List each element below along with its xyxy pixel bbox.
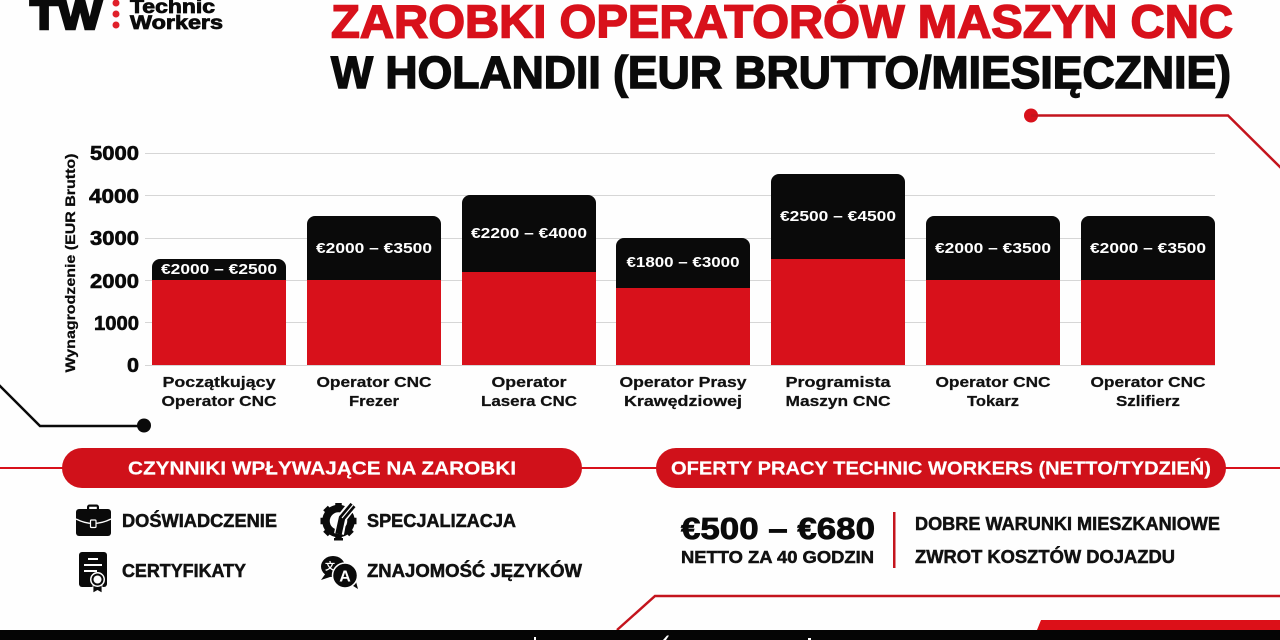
circuit line: top right red: [1024, 108, 1280, 169]
circuit line: left black: [0, 384, 151, 432]
panel: factors affecting salary: [62, 448, 582, 593]
bar: Operator Lasera CNC: Lasera CNC: [481, 393, 577, 410]
bar: Operator CNC Tokarz: Tokarz: [967, 393, 1019, 410]
label: Specjalizacja: SPECJALIZACJA: [367, 511, 516, 531]
bar: Operator Lasera CNC: [462, 195, 596, 410]
heading pill: offers: [656, 448, 1226, 488]
y axis labels: 5000: [90, 143, 139, 165]
title: W HOLANDII (EUR BRUTTO/MIESIĘCZNIE): [331, 47, 1231, 98]
bar chart: salaries: [62, 143, 1215, 410]
heading pill: factors: CZYNNIKI WPŁYWAJĄCE NA ZAROBKI: [128, 458, 516, 478]
bar: Operator Prasy Krawędziowej: Operator Prasy: [620, 374, 747, 391]
bar: Operator CNC Frezer: Operator CNC: [316, 374, 432, 391]
y axis labels: 0: [127, 355, 139, 377]
pay range: €500 – €680: [681, 511, 875, 546]
icon: language speech bubbles: [321, 556, 358, 589]
bar: Operator Prasy Krawędziowej: €1800 – €3000: [626, 254, 740, 271]
heading pill: offers: OFERTY PRACY TECHNIC WORKERS (NETTO/TYDZIEŃ): [671, 458, 1211, 478]
icon: gear with tools: [320, 503, 356, 540]
label: Doświadczenie: DOŚWIADCZENIE: [122, 510, 277, 531]
logo: Technic Workers: [30, 0, 223, 38]
bar: Operator Lasera CNC: €2200 – €4000: [471, 225, 587, 242]
title: [331, 0, 1233, 98]
bar: Operator CNC Szlifierz: €2000 – €3500: [1090, 240, 1206, 257]
circuit line: bottom red: [617, 596, 1280, 630]
bar: Operator Lasera CNC: Operator: [492, 374, 567, 391]
panel connector line: [0, 467, 1280, 469]
logo: Technic Workers: Workers: [130, 13, 223, 34]
bar: Początkujący Operator CNC: Początkujący: [162, 374, 276, 391]
y axis labels: [89, 143, 139, 377]
bar: Operator CNC Tokarz: €2000 – €3500: [935, 240, 1051, 257]
heading pill: factors: [62, 448, 582, 488]
bar: Programista Maszyn CNC: [771, 174, 905, 410]
bar: Początkujący Operator CNC: €2000 – €2500: [161, 261, 277, 278]
benefit: travel costs: ZWROT KOSZTÓW DOJAZDU: [915, 546, 1175, 567]
bar: Programista Maszyn CNC: Programista: [786, 374, 891, 391]
label: Znajomość języków: ZNAJOMOŚĆ JĘZYKÓW: [367, 560, 582, 581]
icon: language speech bubbles: A: [339, 568, 351, 586]
divider: [893, 512, 896, 568]
icon: certificate: [79, 552, 107, 593]
label: Certyfikaty: CERTYFIKATY: [122, 561, 246, 581]
bar: Początkujący Operator CNC: [152, 259, 286, 410]
icon: language speech bubbles: 文: [325, 560, 335, 573]
pay note: NETTO ZA 40 GODZIN: [681, 547, 874, 567]
panel: Technic Workers job offers: [656, 448, 1226, 568]
benefit: housing: DOBRE WARUNKI MIESZKANIOWE: [915, 514, 1220, 534]
footer accent: red block: [1037, 620, 1280, 630]
bar: Programista Maszyn CNC: Maszyn CNC: [786, 393, 891, 410]
bar: Operator CNC Tokarz: [926, 216, 1060, 410]
bar: Operator CNC Frezer: [307, 216, 441, 410]
icon: briefcase: [76, 504, 111, 536]
bar: Operator CNC Frezer: €2000 – €3500: [316, 240, 432, 257]
y axis title: Wynagrodzenie (EUR Brutto): [62, 154, 78, 372]
bar: Operator CNC Frezer: Frezer: [349, 393, 399, 410]
bar: Operator CNC Tokarz: Operator CNC: [936, 374, 1051, 391]
bar: Programista Maszyn CNC: €2500 – €4500: [780, 208, 896, 225]
footer bar: [0, 630, 1280, 640]
y axis labels: 1000: [94, 313, 139, 335]
bar: Początkujący Operator CNC: Operator CNC: [162, 393, 277, 410]
bar: Operator CNC Szlifierz: Operator CNC: [1090, 374, 1206, 391]
bar: Operator CNC Szlifierz: Szlifierz: [1116, 393, 1180, 410]
y axis labels: 4000: [89, 186, 139, 208]
bar: Operator Prasy Krawędziowej: [616, 238, 750, 410]
bar: Operator CNC Szlifierz: [1081, 216, 1215, 410]
y axis labels: 2000: [90, 271, 139, 293]
y axis labels: 3000: [90, 228, 139, 250]
bar: Operator Prasy Krawędziowej: Krawędziowej: [624, 393, 742, 410]
